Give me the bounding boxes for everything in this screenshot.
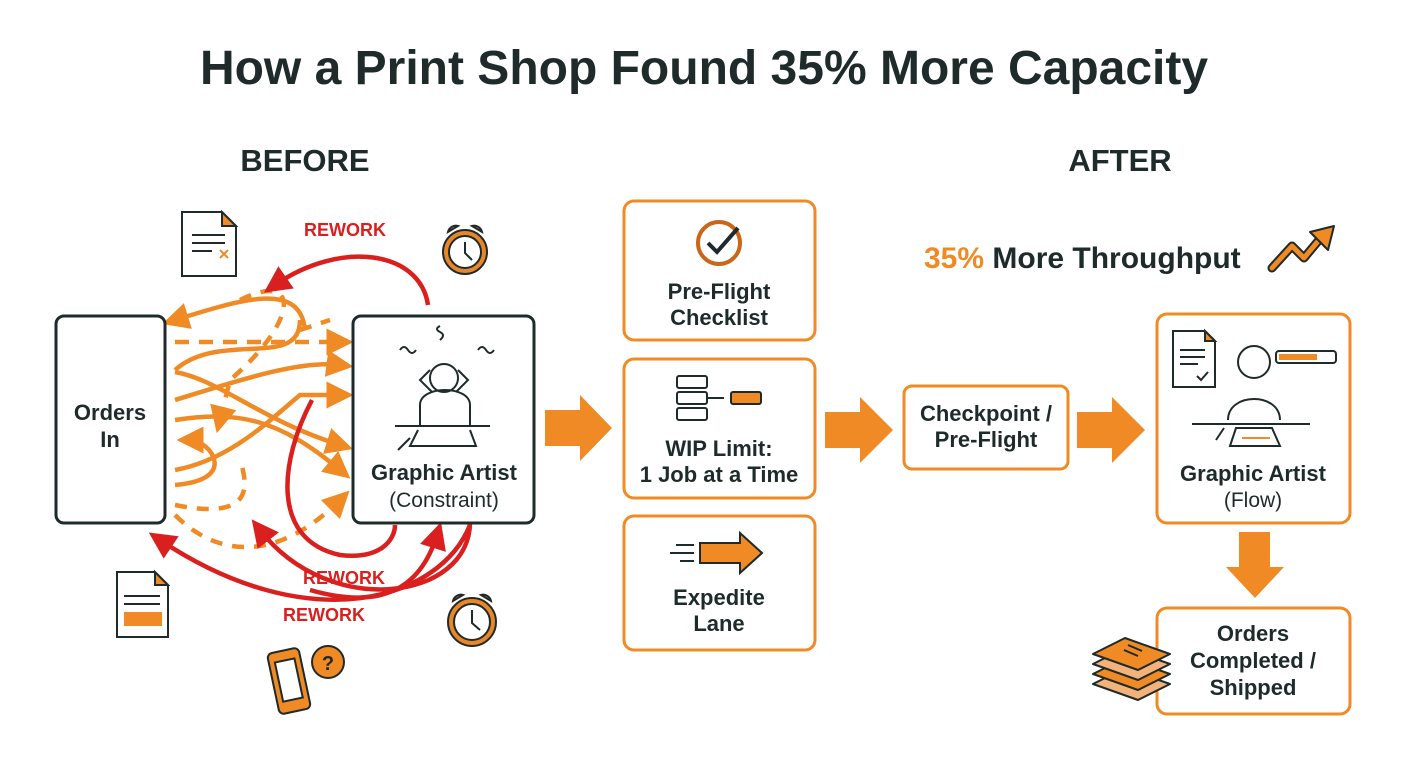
arrow: checkpoint to artist: [1077, 397, 1145, 463]
panel: checkpoint: [904, 386, 1068, 469]
callout: 35% more throughput: 35% More Throughput: [924, 242, 1241, 275]
icon: alarm clock bottom: [448, 595, 496, 646]
panel: expedite lane: Expedite: [673, 585, 765, 610]
callout: 35% more throughput: [924, 226, 1334, 275]
panel: WIP limit: WIP Limit:: [665, 436, 773, 461]
arrow: down to completed: [1226, 532, 1284, 598]
panel: WIP limit: [624, 359, 815, 498]
panel: orders completed: Shipped: [1210, 675, 1296, 700]
icon: stressed artist: [395, 326, 494, 450]
icon: fast arrow: [670, 533, 762, 573]
panel: pre-flight checklist: Pre-Flight: [668, 279, 771, 304]
panel: pre-flight checklist: [624, 201, 815, 340]
label: rework bottom: REWORK: [283, 605, 365, 625]
panel: graphic artist flow: Graphic Artist: [1180, 461, 1327, 486]
rework arrows: [160, 257, 470, 600]
icon: broken document bottom: [117, 572, 168, 637]
icon: alarm clock top: [443, 226, 487, 274]
icon: broken document top: [182, 212, 236, 276]
graphic artist constraint box: (Constraint): [389, 489, 499, 512]
icon: check circle: [698, 222, 740, 264]
arrow: before to interventions: [545, 395, 612, 461]
chaos arrows: [175, 291, 340, 547]
orders in box: [56, 316, 165, 523]
orders in box: In: [100, 427, 120, 452]
graphic artist constraint box: [353, 316, 534, 523]
panel: orders completed: Orders: [1217, 621, 1289, 646]
panel: expedite lane: [624, 516, 815, 650]
panel: orders completed: Completed /: [1190, 648, 1316, 673]
icon: phone question: ?: [322, 653, 334, 675]
graphic artist constraint box: Graphic Artist: [371, 460, 518, 485]
label: rework mid: REWORK: [303, 568, 385, 588]
icon: trend arrow: [1272, 226, 1334, 268]
title: How a Print Shop Found 35% More Capacity: [200, 42, 1208, 95]
panel: checkpoint: Checkpoint /: [920, 401, 1052, 426]
panel: WIP limit: 1 Job at a Time: [640, 462, 798, 487]
icon: queue: [677, 376, 761, 420]
heading: before: BEFORE: [240, 143, 370, 178]
panel: expedite lane: Lane: [693, 611, 745, 636]
orders in box: Orders: [74, 400, 146, 425]
heading: after: AFTER: [1068, 143, 1172, 178]
panel: pre-flight checklist: Checklist: [670, 305, 769, 330]
panel: orders completed: [1157, 608, 1350, 714]
icon: phone question: [267, 646, 344, 715]
arrow: interventions to checkpoint: [825, 397, 893, 463]
label: rework top: REWORK: [304, 220, 386, 240]
panel: graphic artist flow: (Flow): [1224, 489, 1282, 512]
panel: checkpoint: Pre-Flight: [935, 427, 1038, 452]
icon: stack of orders: [1093, 638, 1170, 700]
icon: artist in flow: [1173, 331, 1336, 446]
panel: graphic artist flow: [1157, 314, 1350, 523]
